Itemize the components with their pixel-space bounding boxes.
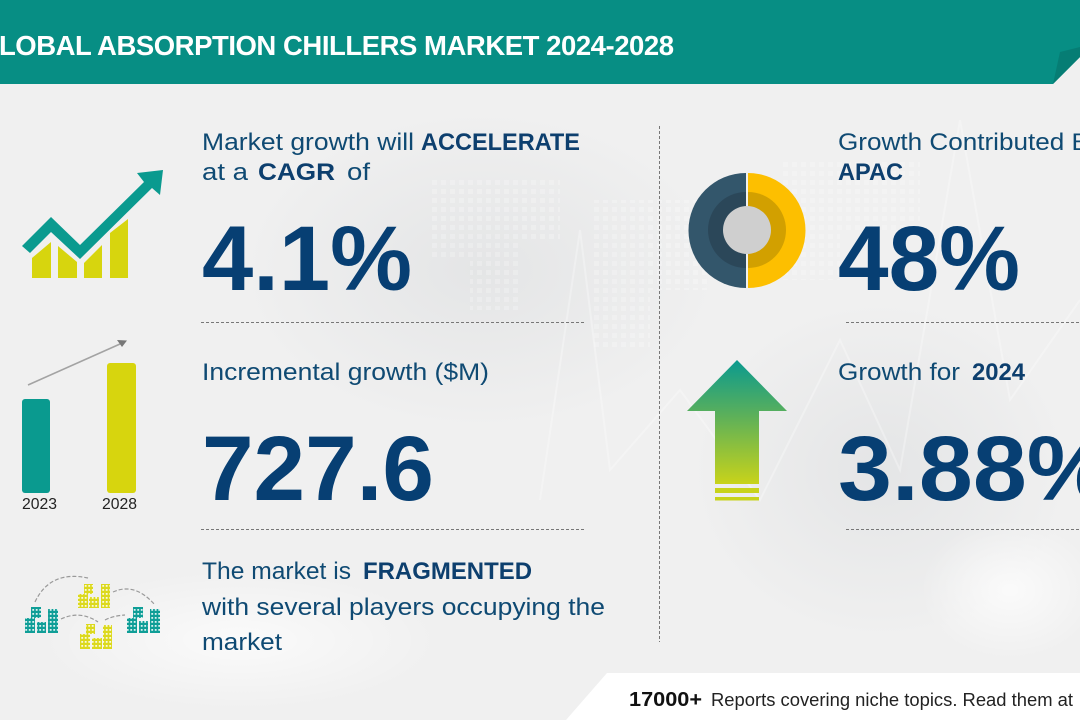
text: growth for 2024 <box>838 359 1026 386</box>
text: growth for 2024: 2024 <box>972 359 1026 386</box>
icon: bar comparison 2023 to 2028: 2023 <box>22 496 57 513</box>
footer text: Reports covering niche topics. Read them at <box>711 689 1073 710</box>
text: growth contributed by APAC: APAC <box>838 159 903 186</box>
icon: rising trend chart <box>22 170 163 278</box>
icon: donut chart <box>688 173 805 288</box>
icon: bar comparison 2023 to 2028: 2028 <box>102 496 137 513</box>
text: market growth: CAGR <box>258 159 335 186</box>
footer text: 17000+ <box>629 689 702 711</box>
text: fragmented market: FRAGMENTED <box>363 558 532 585</box>
title banner <box>0 0 1080 84</box>
value: CAGR: 4.1% <box>202 208 412 310</box>
icon: upward gradient arrow <box>687 360 787 500</box>
text: market growth <box>202 129 580 186</box>
text: growth contributed by APAC: Growth Contributed By <box>838 129 1080 156</box>
text: growth for 2024: Growth for <box>838 359 960 386</box>
text: fragmented market <box>201 558 605 656</box>
text: market growth: ACCELERATE <box>421 129 580 156</box>
footer strip <box>566 673 1080 720</box>
text: fragmented market: The market is <box>202 558 351 585</box>
value: incremental growth: 727.6 <box>202 418 434 520</box>
text: market growth: of <box>347 159 370 186</box>
value: APAC share: 48% <box>838 208 1020 310</box>
text: market growth: Market growth will <box>202 129 414 156</box>
text: fragmented market: with several players occupying the <box>201 594 605 621</box>
text: incremental growth: Incremental growth ($M) <box>202 359 489 386</box>
text: market growth: at a <box>202 159 248 186</box>
icon: fragmented market buildings <box>25 576 160 649</box>
text: fragmented market: market <box>202 629 282 656</box>
icon: bar comparison 2023 to 2028 <box>22 340 137 513</box>
text: growth contributed by APAC <box>838 129 1080 186</box>
